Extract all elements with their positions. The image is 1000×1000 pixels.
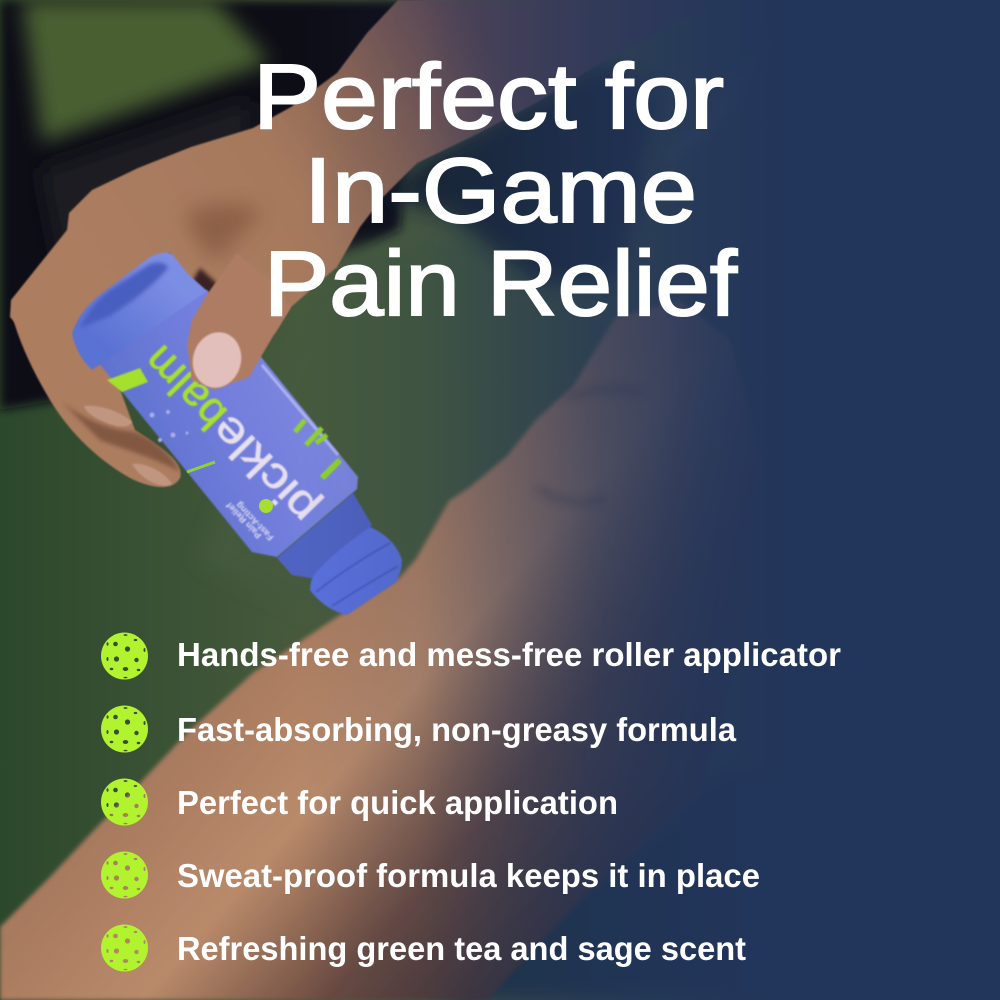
bullet 3 — [101, 778, 618, 826]
lower fingers — [12, 300, 181, 487]
title: In-Game — [304, 140, 697, 242]
title: Pain Relief — [264, 233, 737, 335]
bullet 4 — [101, 852, 760, 898]
green court behind title — [200, 230, 640, 620]
wordmark — [134, 336, 327, 533]
bottle roller head — [310, 527, 402, 615]
bullet 4: Sweat-proof formula keeps it in place — [177, 857, 760, 894]
bullet 2 — [101, 706, 737, 752]
bullet list — [101, 632, 841, 972]
photo: hand and wrist — [10, 0, 720, 487]
dark background behind hand — [0, 0, 420, 410]
bullet 5 — [101, 924, 746, 972]
purple-dark band — [40, 100, 250, 270]
bullet 1: Hands-free and mess-free roller applicator — [177, 636, 841, 673]
title: Perfect for — [253, 46, 724, 148]
bottle cap — [72, 253, 207, 370]
photo: thumb over bottle — [187, 253, 291, 393]
elbow creases — [536, 390, 645, 502]
bullet 3: Perfect for quick application — [177, 784, 618, 821]
small label text: Fast-Acting — [234, 500, 275, 543]
title — [253, 46, 737, 335]
pickleball roller bottle — [72, 253, 402, 615]
dark court at the bottom right — [440, 770, 820, 1000]
dark navy band — [383, 63, 660, 285]
shirt highlight — [663, 17, 783, 165]
hand crease shadow — [184, 204, 262, 262]
green window at top left — [22, 0, 270, 142]
wordmark: pickle — [202, 406, 327, 533]
small label text: Pain Relief — [224, 500, 263, 541]
bullet 5: Refreshing green tea and sage scent — [177, 930, 746, 967]
right side label marks — [295, 420, 327, 445]
photo: forearm — [0, 300, 760, 1000]
fingernails — [84, 406, 132, 426]
bottle body — [98, 290, 358, 557]
green tag — [107, 368, 148, 392]
thumbnail — [187, 327, 247, 393]
bottle highlight strip — [262, 365, 338, 455]
green dot — [259, 499, 273, 513]
bottle neck — [277, 493, 372, 580]
bullet 2: Fast-absorbing, non-greasy formula — [177, 711, 737, 748]
label speckles — [150, 410, 188, 442]
wordmark: balm — [134, 336, 236, 439]
